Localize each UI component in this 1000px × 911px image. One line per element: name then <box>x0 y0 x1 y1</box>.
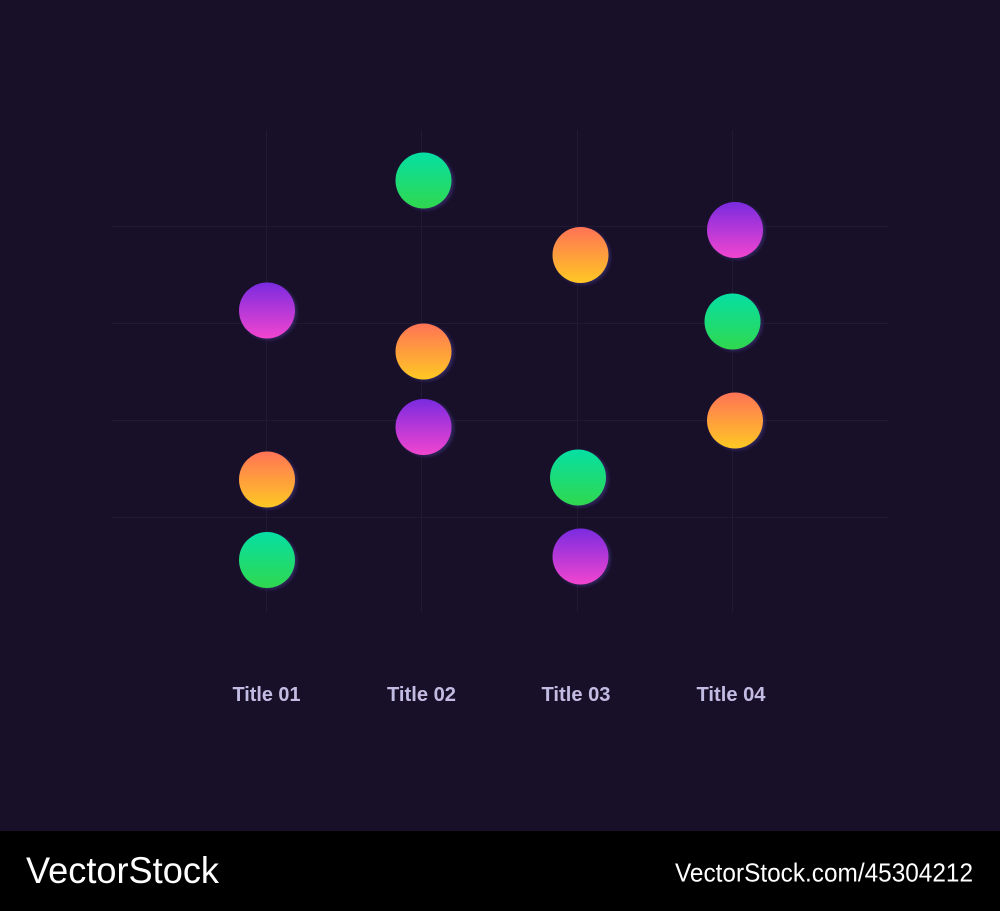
column titles: Title 04 <box>696 684 766 706</box>
column titles: Title 03 <box>542 684 610 706</box>
watermark footer bar <box>0 831 1000 911</box>
column titles: Title 02 <box>387 684 456 706</box>
watermark url: VectorStock.com/45304212 <box>675 858 973 888</box>
column titles <box>232 684 766 706</box>
column titles: Title 01 <box>232 684 300 706</box>
column 2 dots <box>396 152 454 456</box>
column 1 dots <box>239 282 297 590</box>
column 3 dots <box>550 227 610 586</box>
watermark logo text: VectorStock <box>26 850 219 891</box>
column 4 dots <box>704 202 765 450</box>
